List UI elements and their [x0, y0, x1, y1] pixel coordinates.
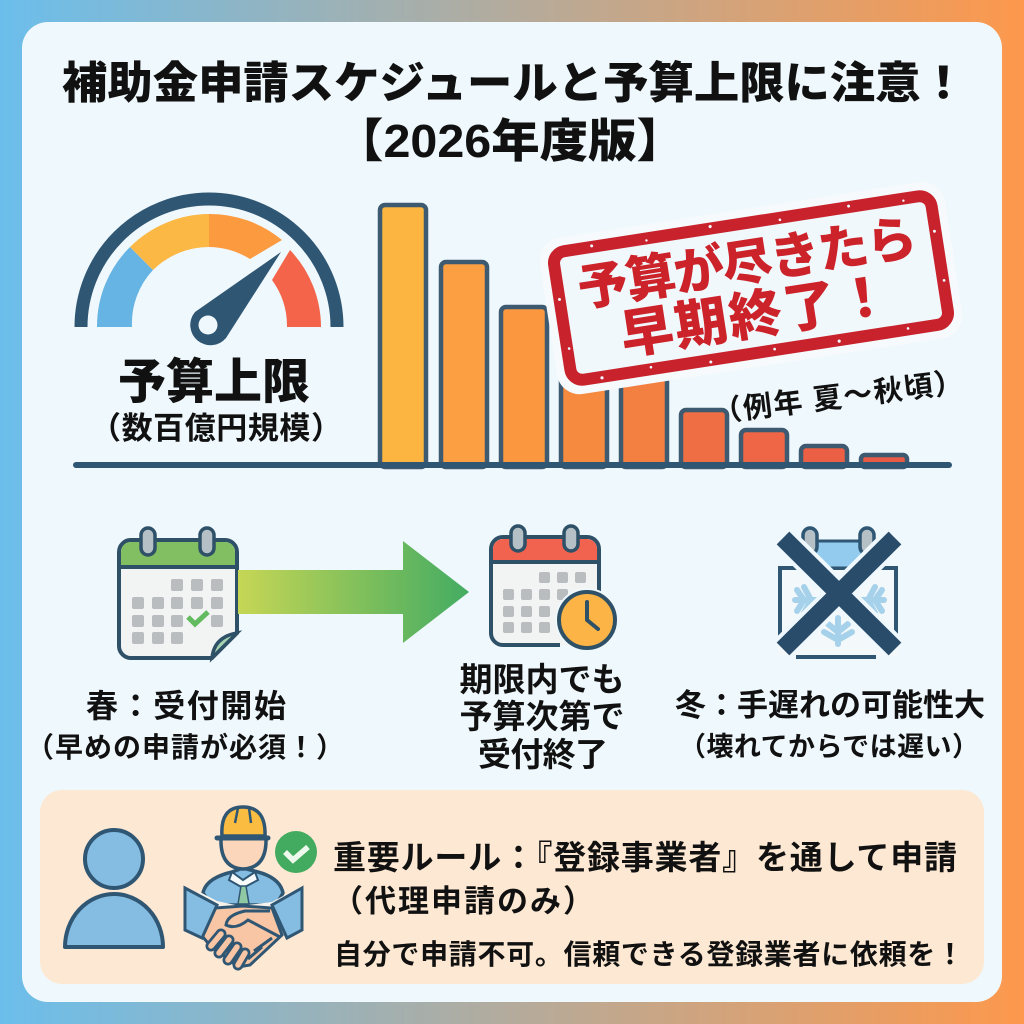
label: within deadline	[460, 661, 624, 773]
label: winter	[675, 688, 985, 762]
calendar: spring start	[119, 528, 237, 658]
fingers	[211, 934, 245, 965]
rule text	[332, 839, 964, 970]
title	[62, 59, 966, 167]
calendar: deadline with clock	[491, 526, 619, 652]
snowflakes	[795, 587, 884, 644]
label: spring	[26, 688, 344, 763]
panel: important rule	[40, 790, 984, 984]
gauge label	[90, 356, 342, 446]
chart baseline	[76, 462, 949, 468]
arrow: start to end	[238, 541, 469, 643]
label: winter: （壊れてからでは遅い）	[679, 732, 979, 762]
icon: registered contractor handshake	[185, 807, 302, 967]
icon: green check	[275, 831, 317, 873]
label: spring: 春：受付開始	[86, 688, 286, 724]
gauge label: （数百億円規模）	[90, 411, 342, 446]
rule text: 重要ルール：『登録事業者』を通して申請	[333, 839, 957, 876]
title: 補助金申請スケジュールと予算上限に注意！	[62, 59, 966, 108]
rule text: （代理申請のみ）	[332, 884, 594, 919]
stamp: early end: 早期終了！	[616, 266, 894, 366]
label: winter: 冬：手遅れの可能性大	[675, 688, 985, 723]
label: spring: （早めの申請が必須！）	[26, 731, 344, 763]
gauge: budget limit	[81, 199, 337, 345]
label: within deadline: 予算次第で	[460, 698, 624, 735]
calendar: winter crossed out	[778, 528, 898, 657]
gauge label: 予算上限	[118, 356, 310, 409]
label: within deadline: 受付終了	[478, 736, 608, 773]
stamp: early end	[547, 189, 955, 387]
rule text: 自分で申請不可。信頼できる登録業者に依頼を！	[334, 939, 964, 970]
stamp wear specks	[550, 191, 953, 385]
title: 【2026年度版】	[335, 115, 685, 167]
stamp: early end: 予算が尽きたら	[574, 209, 920, 317]
label: within deadline: 期限内でも	[460, 661, 624, 698]
icon: applicant person	[65, 830, 163, 947]
declining bar chart	[380, 205, 907, 467]
stamp note: （例年 夏〜秋頃）	[711, 366, 965, 429]
